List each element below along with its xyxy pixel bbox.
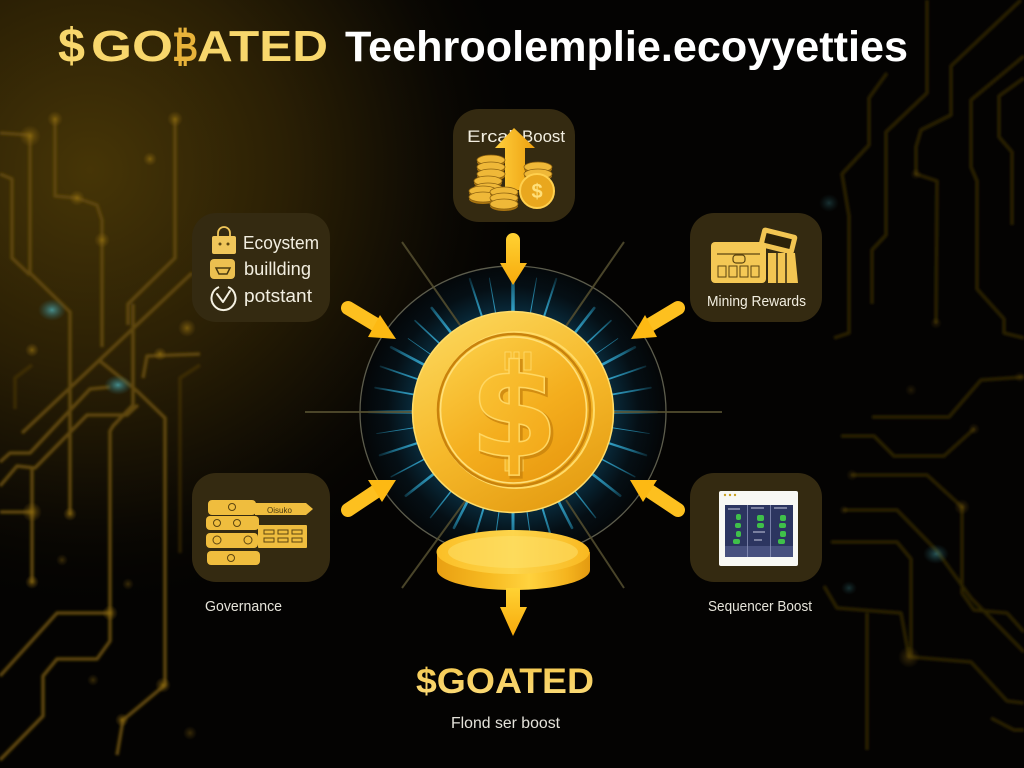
arrow: upper right into coin	[631, 308, 678, 339]
panel: Governance icon tile	[192, 473, 330, 582]
icon: coin stacks: $	[531, 181, 543, 203]
icon: governance stack: Oisuko	[267, 506, 292, 515]
dollar sign: bars	[505, 352, 531, 471]
dollar sign: $	[469, 338, 559, 487]
arrow: lower left into coin	[348, 480, 396, 510]
caption: Flond ser boost: Flond ser boost	[451, 715, 561, 732]
label: Ercal Boost: Boost	[522, 128, 565, 146]
arrow: bottom out of platform	[500, 588, 527, 636]
bottom gold platform disc	[436, 530, 590, 590]
arrow: top into coin	[500, 233, 527, 285]
icon: treasure chest and roll	[711, 227, 798, 283]
label: Ercal Boost: Ercal	[467, 128, 513, 146]
title part: $GO₿ATED in gold	[58, 20, 328, 73]
icon: lock bag	[212, 227, 236, 254]
title	[58, 20, 908, 73]
title part: $GO₿ATED in gold: GO	[91, 22, 173, 71]
title part: $GO₿ATED in gold: ₿	[172, 23, 198, 70]
arrow: lower right into coin	[630, 480, 678, 510]
bottom brand: $GOATED: $GOATED	[416, 662, 594, 701]
icon: building badge	[210, 259, 235, 279]
label: Mining Rewards: Mining Rewards	[707, 294, 806, 310]
panel: Mining Rewards	[690, 213, 822, 322]
label: Ercal Boost	[467, 128, 565, 146]
label: Ecoystem building potstant: potstant	[244, 286, 312, 306]
label: Ecoystem building potstant: Ecoystem	[243, 233, 319, 253]
central gold dollar coin	[412, 312, 614, 512]
title part: $GO₿ATED in gold: ATED	[197, 22, 328, 71]
icon: rising arrow	[495, 128, 535, 190]
label: Sequencer Boost: Sequencer Boost	[708, 599, 812, 615]
label: Ecoystem building potstant	[243, 233, 319, 306]
panel: Ecosystem building	[192, 213, 330, 322]
label: Governance: Governance	[205, 599, 282, 615]
icon: check circle	[212, 287, 236, 310]
panel: Ercal Boost	[453, 109, 575, 222]
radial ring with rays	[305, 242, 722, 588]
title part: $GO₿ATED in gold: $	[58, 20, 85, 73]
dollar sign: $	[471, 340, 561, 489]
panel: Sequencer Boost icon tile	[690, 473, 822, 582]
icon: browser window dashboard	[719, 491, 798, 566]
arrow: upper left into coin	[348, 308, 396, 339]
label: Ecoystem building potstant: buillding	[244, 259, 311, 279]
title part: white subtitle: Teehroolemplie.ecoyyetties	[345, 23, 908, 71]
